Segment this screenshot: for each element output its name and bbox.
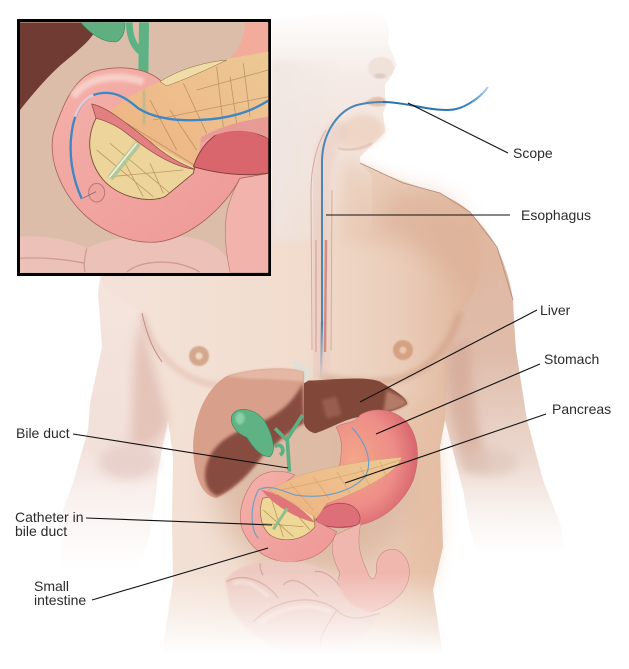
label: Scope: Scope	[513, 145, 553, 161]
intestine loops	[227, 563, 380, 648]
liver right tip	[383, 390, 407, 413]
jejunum	[332, 523, 409, 613]
right elbow shading	[462, 448, 518, 476]
inset pancreas body	[107, 52, 268, 167]
catheter in bile duct	[273, 508, 287, 529]
right torso side tone	[400, 400, 442, 590]
inset bile ducts	[81, 22, 144, 73]
inset pancreas head	[90, 118, 200, 199]
label: Esophagus: Esophagus	[521, 207, 591, 223]
intestine highlight	[233, 582, 330, 623]
inset frame	[18, 20, 270, 274]
inset liver	[20, 22, 97, 110]
label: Small intestine: Small	[34, 578, 69, 594]
falciform ligament	[292, 358, 312, 385]
duodenum upper fold	[262, 490, 315, 523]
lower fade	[0, 572, 629, 669]
neck and head	[272, 8, 513, 300]
pancreas head	[260, 495, 315, 540]
inset catheter	[109, 143, 138, 178]
shoulder outline	[360, 163, 513, 300]
liver streak	[322, 397, 342, 418]
organs	[193, 358, 418, 613]
inset duodenum	[52, 68, 268, 242]
stomach	[315, 410, 418, 528]
head left haze	[272, 60, 347, 240]
esophagus	[311, 125, 342, 378]
label: Pancreas: Pancreas	[552, 401, 611, 417]
right shoulder shading	[350, 185, 472, 295]
liver upper light fade	[227, 368, 304, 382]
neck warm tone	[340, 160, 395, 240]
left arm inner shading	[130, 318, 168, 446]
label: Catheter in bile duct: Catheter in	[15, 509, 83, 525]
lips	[364, 97, 386, 106]
nipple left	[189, 346, 209, 366]
scope highlight fade	[75, 95, 93, 117]
pancreas head ducts	[262, 500, 310, 537]
inset scope	[71, 93, 268, 199]
right arm inner shading	[448, 340, 490, 470]
inset papilla	[89, 183, 105, 202]
inset stomach top	[230, 22, 268, 138]
scope in duodenum and stomach	[252, 427, 369, 538]
liver right lobe	[304, 378, 407, 433]
abdomen shading	[215, 395, 415, 575]
inset intestine lines	[20, 248, 200, 272]
right arm	[430, 192, 564, 572]
leader lines	[73, 103, 546, 600]
inset bile duct through pancreas	[143, 90, 145, 125]
inset stomach fold	[193, 129, 268, 175]
inset intestine	[20, 235, 233, 272]
left arm	[60, 272, 168, 580]
duodenum highlight	[73, 77, 143, 97]
gallbladder and bile ducts	[231, 409, 303, 472]
chin	[340, 115, 385, 148]
nose	[368, 57, 394, 79]
lower stomach fold	[315, 503, 360, 527]
label: Stomach: Stomach	[544, 351, 599, 367]
liver left lobe	[193, 368, 304, 498]
nipple right	[393, 340, 413, 360]
nostril	[374, 74, 386, 78]
inset jejunum	[225, 173, 268, 272]
jaw shadow	[338, 143, 372, 150]
liver left lobe dark interior	[205, 383, 304, 496]
small intestine	[225, 561, 380, 657]
pancreas ducts	[97, 63, 268, 197]
inset panel	[18, 20, 270, 274]
pancreas body	[268, 457, 402, 518]
right pectoral crease	[320, 313, 460, 382]
scope tube	[321, 87, 488, 380]
label: Catheter in bile duct: bile duct	[15, 523, 67, 539]
label: Liver: Liver	[540, 302, 571, 318]
duodenum	[240, 471, 337, 562]
pancreas body lines	[280, 460, 400, 510]
left pectoral crease	[142, 314, 292, 386]
label: Small intestine: intestine	[34, 592, 86, 608]
inset duodenum fold	[92, 104, 195, 169]
left elbow shading	[98, 444, 158, 480]
label: Bile duct: Bile duct	[16, 425, 70, 441]
torso	[100, 140, 481, 669]
